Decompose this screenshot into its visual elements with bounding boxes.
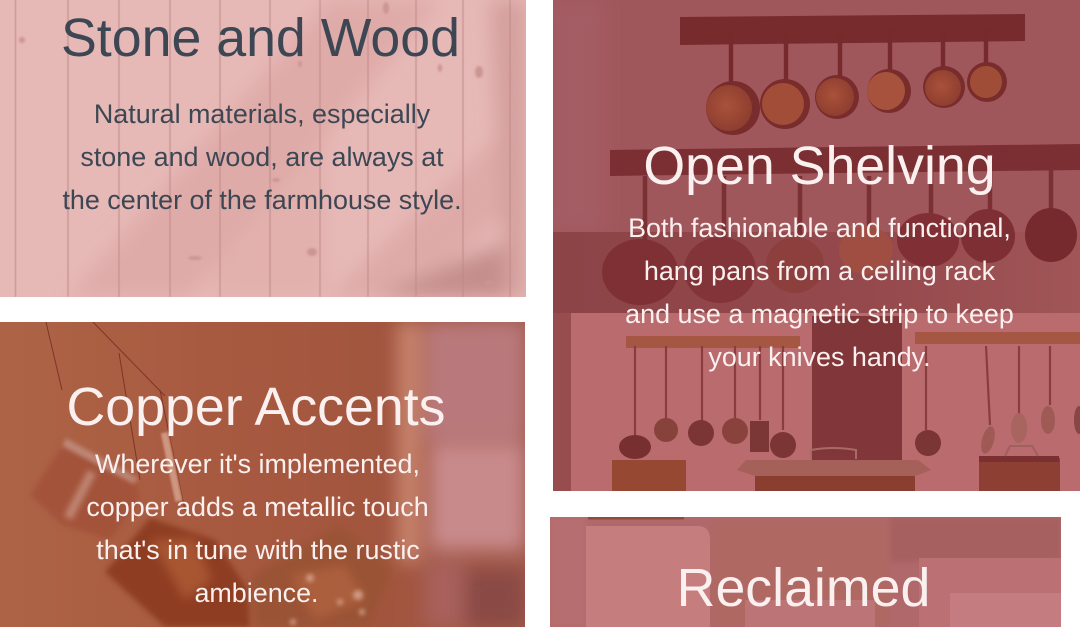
body text: open shelving: hang pans from a ceiling rack xyxy=(644,256,996,286)
upper pan rack xyxy=(680,14,1025,45)
body text: open shelving: Both fashionable and functional, xyxy=(628,213,1011,243)
body text: stone and wood xyxy=(62,99,462,215)
copper pots xyxy=(30,432,392,627)
wood plank shading xyxy=(70,0,526,297)
pot two xyxy=(105,518,250,627)
hanging utensil highlight xyxy=(161,432,182,502)
hanging wires xyxy=(46,322,185,510)
body text: stone and wood: Natural materials, especially xyxy=(94,99,431,129)
body text: open shelving: and use a magnetic strip to keep xyxy=(625,299,1014,329)
body text: copper accents: ambience. xyxy=(194,578,319,608)
wood plank seams xyxy=(16,0,510,297)
body text: copper accents xyxy=(86,449,429,608)
panel: stone and wood xyxy=(0,0,526,297)
heading: reclaimed: Reclaimed xyxy=(677,558,930,618)
wood knots xyxy=(18,2,484,260)
top edge and wall tones xyxy=(888,520,1058,560)
knife racks xyxy=(626,332,1080,348)
counter items xyxy=(745,600,875,627)
ladles and spoons xyxy=(619,406,1080,459)
hanging utensils xyxy=(635,346,1050,435)
heading: stone and wood: Stone and Wood xyxy=(61,8,460,68)
copper stockpots xyxy=(612,446,1060,491)
lower wall xyxy=(553,313,1080,491)
blurred background wall and doorway xyxy=(398,322,525,627)
wall lighting xyxy=(566,13,590,217)
upper row of pans xyxy=(706,42,1007,135)
body text: copper accents: that's in tune with the rustic xyxy=(96,535,420,565)
pot sparkles xyxy=(290,574,365,625)
body text: open shelving: your knives handy. xyxy=(708,342,931,372)
dark doorway xyxy=(812,316,902,461)
heading: open shelving: Open Shelving xyxy=(643,136,996,196)
body text: stone and wood: the center of the farmhouse style. xyxy=(62,185,462,215)
dark top strip xyxy=(588,517,684,520)
body text: stone and wood: stone and wood, are always at xyxy=(80,142,444,172)
body text: copper accents: copper adds a metallic touch xyxy=(86,492,429,522)
cabinet right xyxy=(919,558,1061,627)
panel: open shelving xyxy=(553,0,1080,491)
pot one xyxy=(32,448,138,538)
left pillar xyxy=(553,313,571,491)
panel: copper accents xyxy=(0,322,525,627)
white cabinet left xyxy=(586,526,710,627)
stone backsplash xyxy=(553,232,1020,313)
body text: open shelving xyxy=(625,213,1014,372)
pot three xyxy=(254,530,386,625)
body text: copper accents: Wherever it's implemented, xyxy=(95,449,420,479)
second row of pans xyxy=(602,165,1077,305)
panel: reclaimed xyxy=(550,517,1061,627)
lower pan rack xyxy=(610,144,1080,176)
heading: copper accents: Copper Accents xyxy=(66,377,446,437)
